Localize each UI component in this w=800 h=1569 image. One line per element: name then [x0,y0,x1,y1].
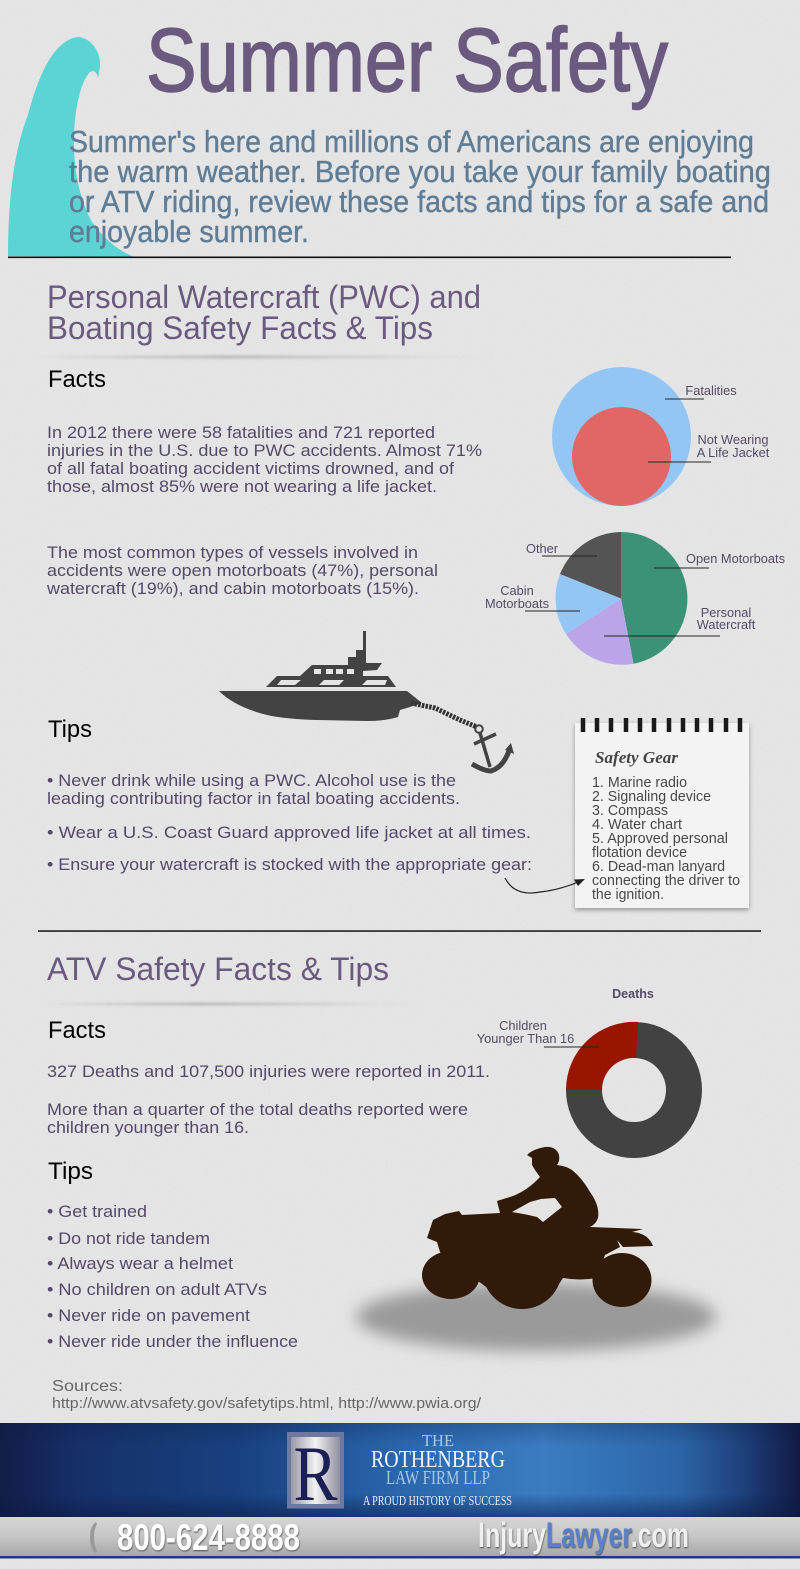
notepad: safety gear: 4. Water chart [592,817,682,833]
text: ATV tips list: • Always wear a helmet [47,1254,233,1273]
text: vessel facts: watercraft (19%), and cabin motorboats (15%). [46,579,419,598]
text: vessel facts [46,543,438,598]
logo: R monogram: R [294,1430,338,1517]
heading: Facts: Facts [48,366,106,393]
text: ATV tips list [47,1202,298,1351]
text: firm name: THE [422,1431,454,1450]
notepad: safety gear: 1. Marine radio [592,775,687,791]
chart: life jacket circles [552,367,770,506]
icon: phone [90,1522,97,1553]
intro text: the warm weather. Before you take your family boating [69,154,771,189]
intro text: Summer's here and millions of Americans are enjoying [69,124,754,159]
chart: life jacket circles: Not Wearing [698,432,768,447]
heading: PWC: Personal Watercraft (PWC) and [47,279,481,315]
notepad: safety gear: 3. Compass [592,803,668,819]
chart: deaths donut: Deaths [612,987,654,1001]
icon: boat with anchor [219,631,514,771]
panel: ATV safety [45,951,716,1412]
text: vessel facts: The most common types of vessels involved in [47,543,418,562]
text: ATV facts: children younger than 16. [47,1118,249,1137]
chart: deaths donut: Children [499,1018,547,1033]
contact bar [0,1516,800,1558]
notepad: safety gear: the ignition. [592,887,664,903]
notepad: safety gear: 5. Approved personal [592,831,728,847]
chart: vessel types pie: Personal [701,605,751,620]
notepad: safety gear: flotation device [592,845,687,861]
intro text: enjoyable summer. [69,214,309,249]
notepad: safety gear: connecting the driver to [592,873,740,889]
chart: vessel types pie: Motorboats [485,596,549,611]
text: ATV tips list: • Do not ride tandem [47,1229,210,1248]
text: ATV tips list: • Get trained [47,1202,147,1221]
text: firm name [363,1431,512,1509]
text: firm name: A PROUD HISTORY OF SUCCESS [363,1494,512,1509]
icon: ATV rider silhouette [356,1147,716,1351]
text: ATV tips list: • No children on adult ATVs [47,1280,267,1299]
heading: ATV: ATV Safety Facts & Tips [47,951,389,987]
chart: vessel types pie: Open Motorboats [686,551,785,566]
panel: PWC and boating safety [40,279,785,908]
notepad: safety gear [575,718,749,908]
text: sources [52,1378,482,1412]
chart: deaths donut [477,987,702,1158]
text: firm name: ROTHENBERG [371,1447,505,1473]
text: boating tips: • Never drink while using a PWC. Alcohol use is the [47,771,456,790]
chart: vessel types pie: Cabin [500,583,534,598]
text: phone number: 800-624-8888 [117,1517,300,1558]
heading: Tips: Tips [48,716,92,743]
notepad: safety gear: Safety Gear [595,748,678,767]
text: fatalities facts: those, almost 85% were not wearing a life jacket. [47,477,437,496]
notepad: safety gear: 2. Signaling device [592,789,711,805]
chart: deaths donut: Younger Than 16 [477,1031,574,1046]
text: website: InjuryLawyer.com [478,1516,689,1555]
text: vessel facts: accidents were open motorboats (47%), personal [47,561,438,580]
chart: life jacket circles: A Life Jacket [697,445,770,460]
heading: Tips: Tips [48,1158,93,1185]
intro text [69,124,771,249]
text: boating tips [47,771,532,874]
title: Summer Safety [146,11,668,111]
text: boating tips: • Wear a U.S. Coast Guard approved life jacket at all times. [47,823,531,842]
icon: teal wave [8,37,134,257]
text: fatalities facts: of all fatal boating accident victims drowned, and of [47,459,454,478]
text: fatalities facts [47,423,482,496]
heading: PWC: Boating Safety Facts & Tips [47,310,433,346]
text: fatalities facts: injuries in the U.S. due to PWC accidents. Almost 71% [47,441,482,460]
text: boating tips: leading contributing factor in fatal boating accidents. [47,789,460,808]
heading: PWC [47,279,481,346]
icon: spiral binding [583,718,740,732]
notepad: safety gear: 6. Dead-man lanyard [592,859,725,875]
chart: vessel types pie: Other [526,541,559,556]
text: ATV facts: 327 Deaths and 107,500 injuries were reported in 2011. [47,1062,490,1081]
text: ATV tips list: • Never ride under the influence [47,1332,298,1351]
text: fatalities facts: In 2012 there were 58 fatalities and 721 reported [47,423,435,442]
text: ATV facts [47,1062,490,1137]
chart: life jacket circles: Fatalities [685,383,737,398]
text: sources: Sources: [52,1378,123,1395]
text: firm name: LAW FIRM LLP [386,1467,490,1489]
text: ATV facts: More than a quarter of the total deaths reported were [47,1100,468,1119]
footer: law firm banner [0,1423,800,1558]
text: ATV tips list: • Never ride on pavement [47,1306,250,1325]
text: boating tips: • Ensure your watercraft is stocked with the appropriate gear: [47,855,532,874]
heading: Facts: Facts [48,1017,106,1044]
text: sources: http://www.atvsafety.gov/safetytips.html, http://www.pwia.org/ [52,1396,482,1412]
arrow: to notepad [505,878,585,893]
chart: vessel types pie: Watercraft [697,617,756,632]
chart: vessel types pie [485,532,785,665]
